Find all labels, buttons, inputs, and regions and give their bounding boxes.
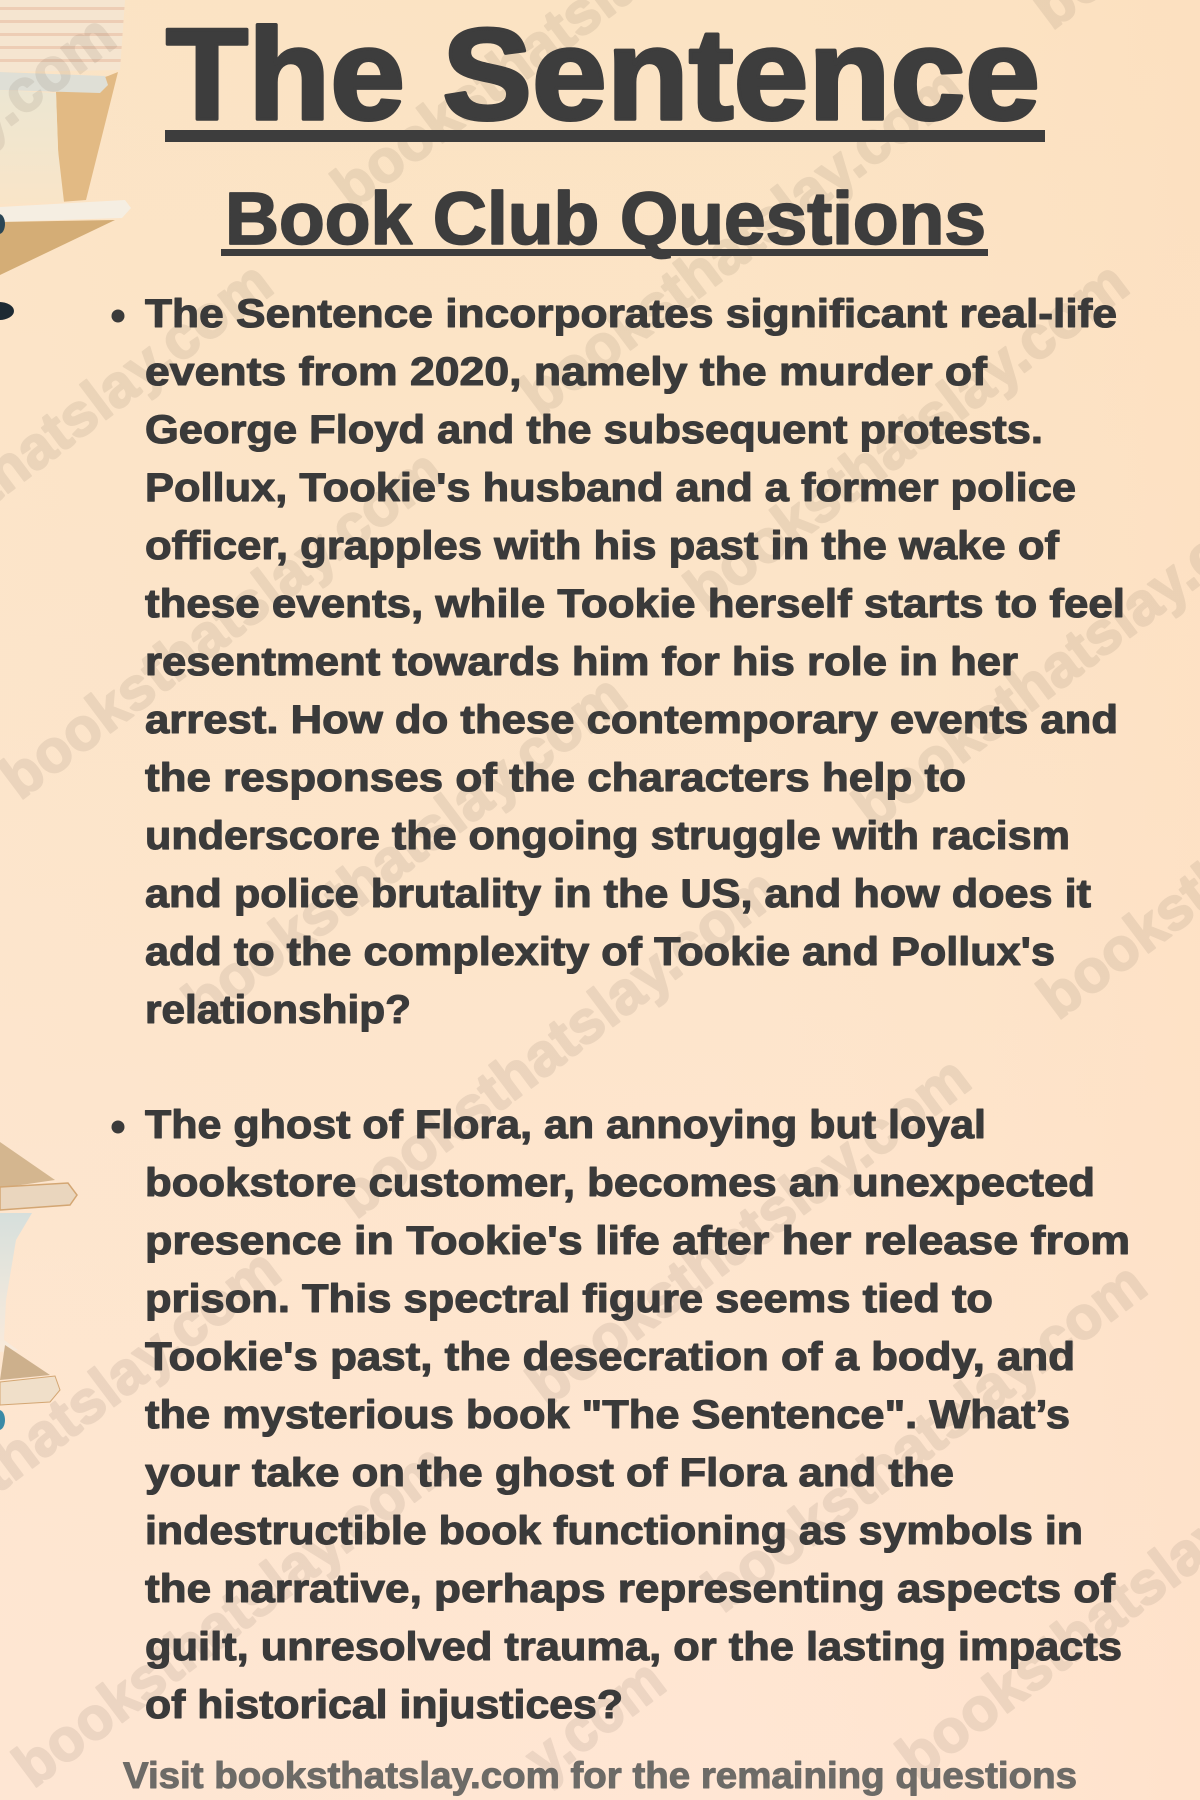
question 1: underscore the ongoing struggle with racism (145, 814, 1070, 858)
question 1: arrest. How do these contemporary events and (145, 698, 1118, 742)
watermarks: booksthatslay.com: y.com (513, 1646, 677, 1792)
watermarks: booksthatslay.com: booksthatslay.com (673, 248, 1140, 623)
watermarks: booksthatslay.com: booksthatslay.com (0, 436, 455, 811)
question 1: the responses of the characters help to (145, 756, 966, 800)
question 1: officer, grapples with his past in the wake of (145, 524, 1060, 568)
question 2: prison. This spectral figure seems tied to (145, 1277, 993, 1321)
illustration: bottom book stack at left edge (0, 1142, 77, 1430)
question 1 (112, 292, 1125, 1032)
question 1: George Floyd and the subsequent protests. (145, 408, 1043, 452)
question 1: resentment towards him for his role in her (145, 640, 1018, 684)
question 2: of historical injustices? (145, 1683, 623, 1727)
watermarks: booksthatslay.com: booksthatslay.com (324, 855, 791, 1230)
title: The Sentence (166, 1, 1040, 147)
question 2: indestructible book functioning as symbols in (145, 1509, 1083, 1553)
footer call to action: Visit booksthatslay.com for the remaining questions (123, 1755, 1077, 1796)
question 1: and police brutality in the US, and how does it (145, 872, 1091, 916)
question 2: the narrative, perhaps representing aspects of (145, 1567, 1116, 1611)
watermarks: booksthatslay.com: booksthatslay.com (515, 1043, 982, 1418)
question 2: The ghost of Flora, an annoying but loyal (145, 1103, 986, 1147)
illustration: top book stack at left edge (0, 0, 131, 320)
question 2: your take on the ghost of Flora and the (145, 1451, 954, 1495)
question 1: events from 2020, namely the murder of (145, 350, 988, 394)
question 1: The Sentence incorporates significant real-life (145, 292, 1117, 336)
question 2: Tookie's past, the desecration of a body, and (145, 1335, 1075, 1379)
question 1: these events, while Tookie herself starts to feel (145, 582, 1125, 626)
watermarks: booksthatslay.com: booksthatslay.com (171, 661, 638, 1036)
subtitle: Book Club Questions (225, 177, 986, 260)
question 2 (112, 1103, 1130, 1727)
question 2: the mysterious book "The Sentence". What’s (145, 1393, 1070, 1437)
question 1: Pollux, Tookie's husband and a former police (145, 466, 1076, 510)
question 1: relationship? (145, 988, 411, 1032)
watermarks: booksthatslay.com: booksthatslay.com (1, 1430, 461, 1800)
question 1: add to the complexity of Tookie and Pollux's (145, 930, 1055, 974)
question 2: bookstore customer, becomes an unexpected (145, 1161, 1095, 1205)
question 2: presence in Tookie's life after her release from (145, 1219, 1130, 1263)
watermarks: booksthatslay.com: booksthatslay.com (691, 1249, 1158, 1624)
watermarks: booksthatslay.com: booksthatslay.com (508, 53, 975, 428)
question 2: guilt, unresolved trauma, or the lasting impacts (145, 1625, 1122, 1669)
